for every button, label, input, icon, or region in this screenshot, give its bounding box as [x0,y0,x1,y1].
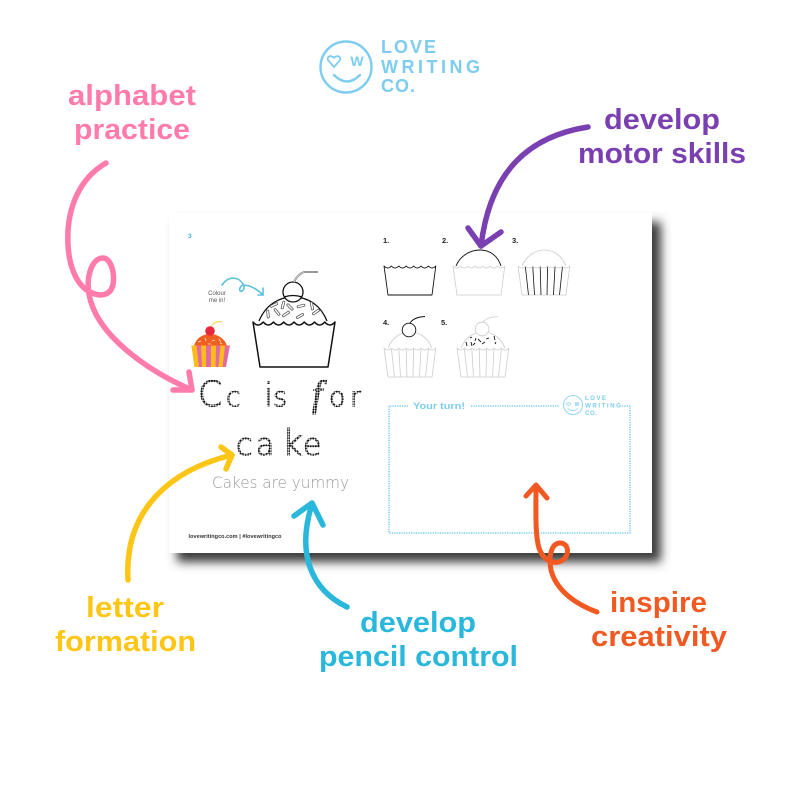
label: develop pencil control: pencil control [319,641,518,673]
logo wordmark [381,37,480,96]
label: inspire creativity: creativity [591,621,727,653]
arrow: develop motor skills [468,127,588,246]
arrow: inspire creativity [526,485,597,612]
step labels: 3. [512,236,518,245]
tracing text: Cakes are yummy: Cakes are yummy [212,473,349,492]
worksheet shadow [177,222,661,562]
step labels: 1. [383,236,389,245]
logo wordmark: CO. [381,76,415,96]
colour me in note: me in! [209,298,226,304]
icon: large cupcake outline [253,272,335,367]
step labels: 2. [442,236,448,245]
logo wordmark: WRITING [381,57,480,77]
label: letter formation: letter [86,592,164,624]
step 5 cupcake [457,316,509,377]
logo wordmark: LOVE [381,37,436,57]
arrow: colour me in [222,278,263,295]
arrow: alphabet practice [68,163,192,390]
small logo: CO. [585,410,597,417]
label: letter formation: formation [55,626,196,658]
label: alphabet practice: practice [74,114,190,146]
arrow: develop pencil control [294,503,347,607]
label: letter formation [55,592,196,658]
panel: worksheet page [169,213,652,553]
label: develop motor skills [578,104,746,170]
label: alphabet practice: alphabet [68,80,196,112]
step 4 cupcake [384,316,436,377]
dotted text: cake: k [282,423,303,464]
dotted text: Cc is for: C [198,375,222,415]
label: develop pencil control: develop [360,607,476,639]
step labels: 4. [383,318,389,327]
step 2 cupcake [453,250,505,295]
small logo: LOVE [585,395,606,402]
colour me in note: Colour [208,291,226,297]
logo icon: smiley face: W [350,53,364,69]
dotted text: cake: e [303,428,321,463]
page number: 3 [188,233,192,240]
dotted text: Cc is for: f [312,374,327,415]
dotted text: Cc is for: s [273,382,287,413]
sprinkles [267,301,320,319]
dotted text: Cc is for: r [350,382,362,413]
label: develop motor skills: develop [604,104,720,136]
colour me in note [208,291,226,304]
dotted text: cake: c [236,428,252,463]
step 3 cupcake [518,250,570,295]
label: develop motor skills: motor skills [578,138,746,170]
label: develop pencil control [319,607,518,673]
dotted text: Cc is for: i [264,376,273,414]
logo [320,37,480,96]
label: alphabet practice [68,80,196,146]
footer: lovewritingco.com | #lovewritingco [188,534,282,540]
arrow: letter formation [128,447,232,580]
small logo: W [575,402,580,408]
label: inspire creativity: inspire [610,587,707,619]
dotted text: cake: a [256,428,274,463]
dotted text: Cc is for: o [329,382,346,413]
your turn heading: Your turn! [413,401,465,412]
dotted text: Cc is for: c [226,382,241,413]
logo icon: smiley face [320,42,372,92]
label: inspire creativity [591,587,727,653]
small logo [564,395,621,417]
step 1 cupcake [384,266,436,295]
icon: coloured cupcake [192,322,230,367]
small logo: WRITING [585,402,621,410]
panel: your turn box [389,395,630,533]
step labels [383,236,518,327]
step labels: 5. [441,318,447,327]
